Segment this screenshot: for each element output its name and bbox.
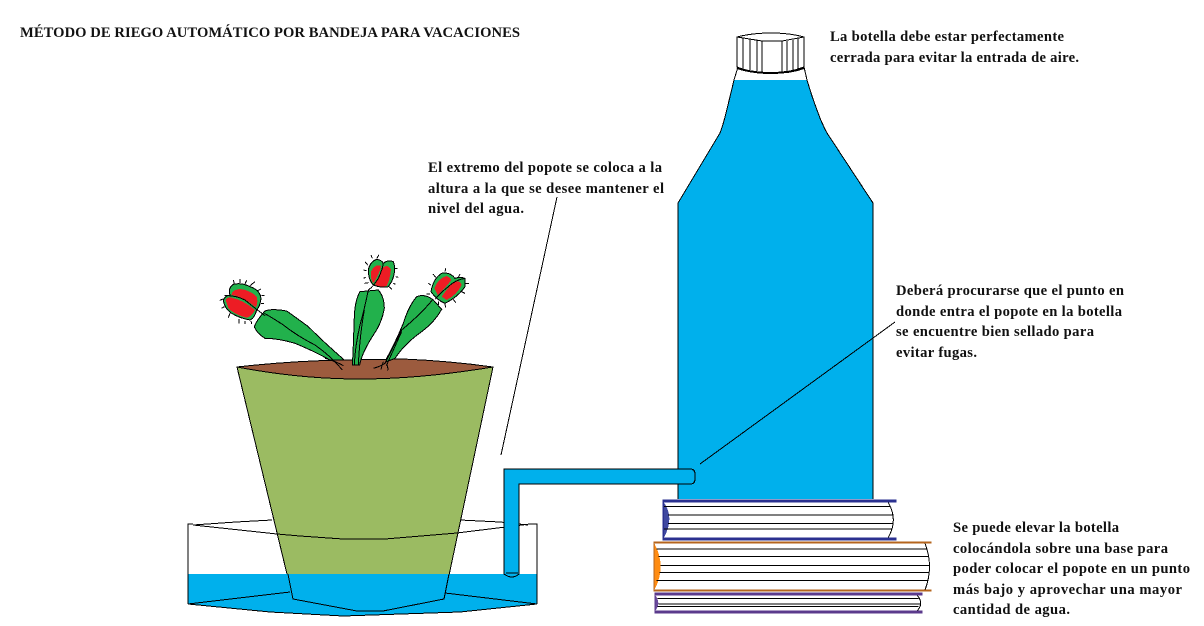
- stack of books: [653, 499, 932, 613]
- leader line: bottle seal: [700, 322, 895, 464]
- blue book: [662, 499, 897, 540]
- callout: straw end height: altura a la que se desee mantener el: [428, 181, 664, 197]
- plant pot: [237, 359, 493, 611]
- callout: raise the bottle: [953, 520, 1190, 618]
- callout: raise the bottle: Se puede elevar la botella: [953, 520, 1120, 536]
- callout: seal entry point: donde entra el popote en la botella: [896, 304, 1123, 320]
- callout: bottle closed: [830, 29, 1079, 66]
- callout: raise the bottle: colocándola sobre una base para: [953, 541, 1169, 557]
- purple book: [654, 593, 923, 613]
- callout: raise the bottle: poder colocar el popote en un punto: [953, 561, 1190, 577]
- callout: seal entry point: evitar fugas.: [896, 345, 977, 361]
- panel: water bottle: [678, 33, 873, 499]
- callout: straw end height: nivel del agua.: [428, 201, 524, 217]
- callout: raise the bottle: cantidad de agua.: [953, 602, 1070, 618]
- callout: bottle closed: La botella debe estar perfectamente: [830, 29, 1065, 45]
- panel: potted plant in water tray: [188, 255, 537, 616]
- leader line: straw end height: [501, 197, 557, 455]
- orange book: [653, 542, 932, 591]
- callout: straw end height: El extremo del popote se coloca a la: [428, 160, 663, 176]
- tray water: [188, 574, 537, 616]
- plant: centre and right flytrap leaves: [352, 255, 469, 371]
- callout: seal entry point: [896, 283, 1124, 361]
- bottle outline: [678, 80, 873, 499]
- callout: seal entry point: Deberá procurarse que el punto en: [896, 283, 1124, 299]
- bottle body with water: [678, 80, 873, 499]
- title: MÉTODO DE RIEGO AUTOMÁTICO POR BANDEJA PARA VACACIONES: [20, 24, 520, 41]
- callout: raise the bottle: más bajo y aprovechar una mayor: [953, 582, 1183, 598]
- straw tube: [504, 469, 695, 577]
- callout: bottle closed: cerrada para evitar la entrada de aire.: [830, 50, 1079, 66]
- water tray: [188, 520, 537, 616]
- callout: seal entry point: se encuentre bien sellado para: [896, 324, 1095, 340]
- plant: left flytrap leaf: [220, 279, 344, 370]
- bottle neck outline: [734, 67, 807, 80]
- bottle cap: [737, 33, 804, 73]
- pot base under water: [288, 574, 449, 611]
- callout: straw end height: [428, 160, 664, 217]
